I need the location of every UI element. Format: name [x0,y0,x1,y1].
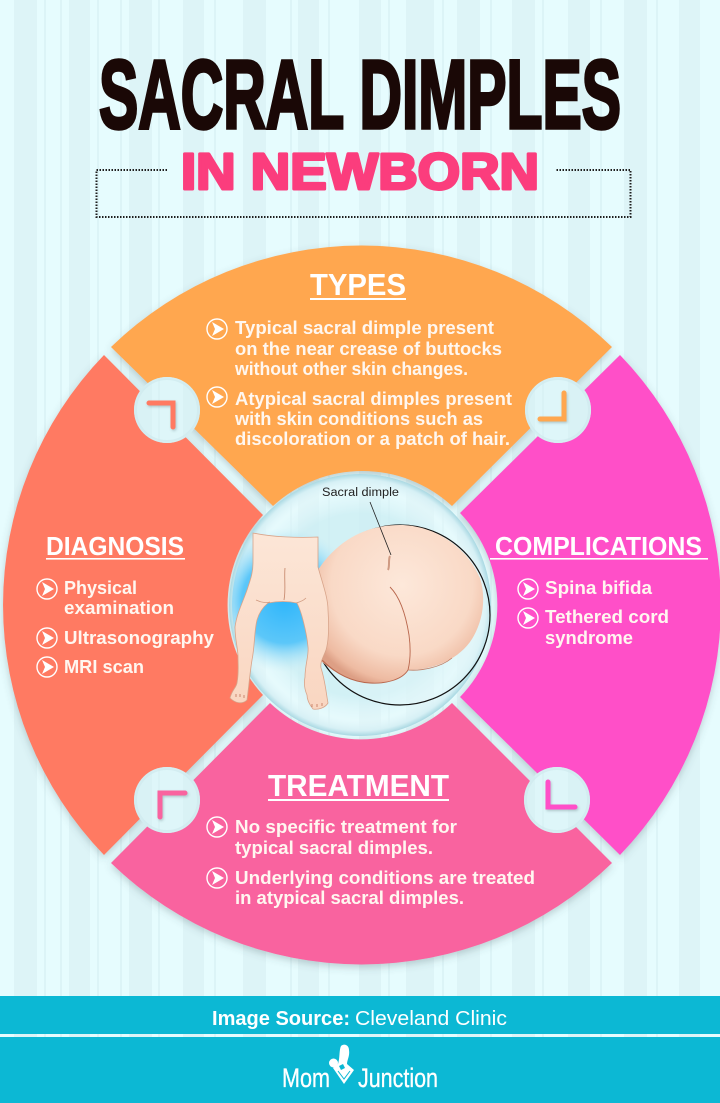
text block: tethered cord syndrome [545,606,669,648]
text block: atypical treatment [235,867,535,908]
text block: atypical treatment: Underlying conditions are treated [235,867,535,888]
source name: Cleveland Clinic [355,1008,507,1030]
footer: logo band [0,1037,720,1103]
icon: bullet arrow [37,657,57,677]
connector: bottom-left [134,767,200,833]
leader line [370,502,391,555]
panel: types [111,246,612,506]
text block: physical examination: examination [64,597,174,618]
text block: atypical dimple: Atypical sacral dimples present [235,388,512,409]
text block: physical examination [64,577,174,618]
magnified circle outline [310,525,490,705]
heading: treatment: TREATMENT [268,768,449,803]
text: ultrasonography: Ultrasonography [64,627,215,648]
text block: typical treatment: typical sacral dimples. [235,837,433,858]
text: spina bifida: Spina bifida [545,577,653,598]
subtitle: in newborn: IN NEWBORN [181,143,539,200]
text block: typical dimple: Typical sacral dimple present [235,317,494,338]
panel: complications [460,355,720,855]
text block: tethered cord syndrome: syndrome [545,627,633,648]
connector: bottom-right [524,767,590,833]
text block: typical dimple: on the near crease of buttocks [235,338,502,359]
icon: bullet arrow [207,817,227,837]
heading: complications: COMPLICATIONS [495,531,702,561]
icon: bullet arrow [518,608,538,628]
connector: top-right [525,377,591,443]
heading: types: TYPES [310,267,406,302]
text block: tethered cord syndrome: Tethered cord [545,606,669,627]
heading: diagnosis: DIAGNOSIS [46,531,184,561]
footer: image source bar [0,996,720,1034]
central illustration: sacral dimple [200,474,491,736]
magnified buttocks [316,525,483,683]
panel: treatment [111,703,612,964]
text block: typical dimple: without other skin changes. [234,358,468,379]
text block: atypical dimple: discoloration or a patch of hair. [235,428,510,449]
logo: wordmark junction: Junction [358,1063,438,1093]
icon: bullet arrow [37,628,57,648]
icon: bullet arrow [207,319,227,339]
label: sacral dimple: Sacral dimple [322,487,399,499]
icon: bullet arrow [207,387,227,407]
connector: top-left [134,377,200,443]
logo: wordmark mom: Mom [282,1063,330,1093]
panel: diagnosis [3,355,263,855]
text block: atypical dimple: with skin conditions such as [234,408,483,429]
text: MRI scan: MRI scan [64,656,144,677]
logo: mother and child [329,1045,354,1084]
baby lower body [230,533,329,709]
text block: physical examination: Physical [64,577,137,598]
text block: typical treatment: No specific treatment for [235,816,457,837]
text block: atypical dimple [234,388,512,449]
text block: typical dimple [234,317,502,379]
icon: bullet arrow [207,868,227,888]
source text: Image Source: [212,1008,350,1030]
dotted title frame [96,170,630,217]
text block: atypical treatment: in atypical sacral dimples. [235,887,464,908]
text block: typical treatment [235,816,457,858]
icon: bullet arrow [37,579,57,599]
icon: bullet arrow [518,579,538,599]
